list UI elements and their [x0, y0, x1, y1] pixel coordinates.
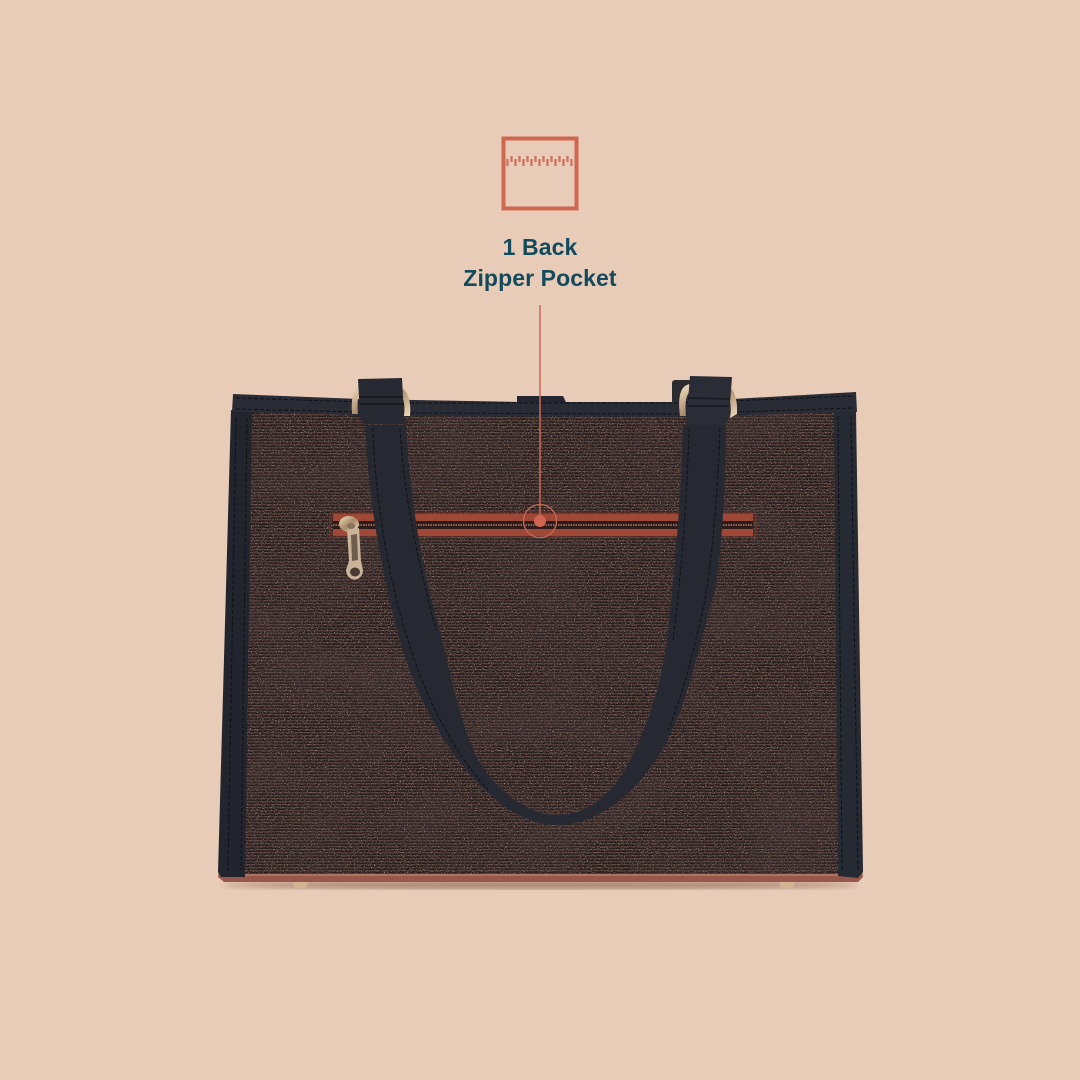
- rear right buckle: [672, 380, 692, 406]
- leather base: [218, 870, 863, 882]
- top leather band: [232, 392, 857, 417]
- zipper pocket: [330, 513, 756, 537]
- callout marker: [524, 504, 556, 538]
- heading: 1 Back Zipper Pocket: 1 Back: [503, 234, 577, 260]
- heading: 1 Back Zipper Pocket: [463, 234, 617, 291]
- bag strap: [366, 425, 726, 825]
- woven fabric panel: [236, 410, 841, 874]
- bag feet: [293, 878, 794, 888]
- bag: [218, 376, 863, 889]
- heading: 1 Back Zipper Pocket: Zipper Pocket: [463, 265, 617, 291]
- callout leader line: [539, 305, 541, 515]
- left strap loop and ring: [352, 378, 410, 424]
- right strap loop and ring: [679, 376, 737, 426]
- left leather trim: [218, 410, 252, 877]
- rear handle tab: [517, 396, 566, 402]
- icon: zipper pocket: [504, 138, 576, 208]
- shadow under bag: [222, 881, 858, 889]
- right leather trim: [834, 410, 863, 878]
- zipper pull: [339, 516, 363, 580]
